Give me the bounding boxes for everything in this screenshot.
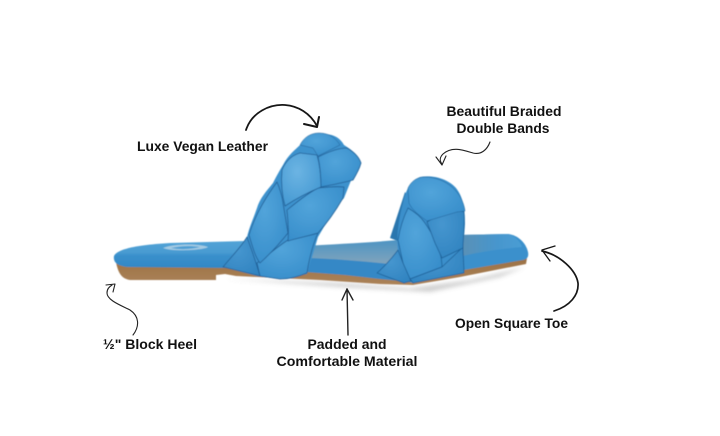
toe [458,234,528,271]
label: beautiful braided double bands: Beautiful Braided [446,104,562,119]
front strap bottom left lobe [223,237,260,276]
arrow: to heel [106,284,138,335]
label: padded and comfortable material [276,289,418,369]
label: beautiful braided double bands: Double Bands [456,121,550,136]
front braided strap [223,133,361,279]
footbed heel [114,241,245,268]
label: luxe vegan leather [137,105,319,154]
midsection band [306,258,412,282]
rear strap top lobe [408,177,465,221]
label: open square toe: Open Square Toe [455,316,568,331]
front strap upper right lobe [318,148,361,187]
rear strap lower left lobe [377,250,411,283]
front strap upper left lobe [282,153,321,206]
front strap middle left lobe [249,182,288,263]
front strap silhouette [223,133,361,279]
label: luxe vegan leather: Luxe Vegan Leather [137,139,269,154]
strap behind rear [390,192,412,241]
sole [116,258,527,285]
label: beautiful braided double bands [436,104,562,165]
arrow: to toe [542,246,578,311]
front strap lower lobe [257,233,318,279]
arrow: to rear strap [436,142,490,165]
label: padded and comfortable material: Comfortable Material [276,354,418,369]
rear strap centre lobe [398,208,442,279]
arrow: to front strap [246,105,319,130]
rear strap right lobe [427,206,464,258]
front strap top cap lobe [300,133,340,156]
label: half inch block heel: ½" Block Heel [103,337,197,352]
insole between straps [305,240,398,266]
sandal [114,133,528,292]
label: half inch block heel [103,284,197,352]
rear braided strap [377,177,465,283]
ground shadow [225,267,525,292]
label: open square toe [455,246,578,331]
brand logo on footbed [163,244,208,250]
label: padded and comfortable material: Padded and [308,337,386,352]
rear strap silhouette [377,176,465,283]
rear strap lower right lobe [410,247,464,283]
arrow: to sole [342,289,353,335]
front strap middle right lobe [287,187,344,241]
